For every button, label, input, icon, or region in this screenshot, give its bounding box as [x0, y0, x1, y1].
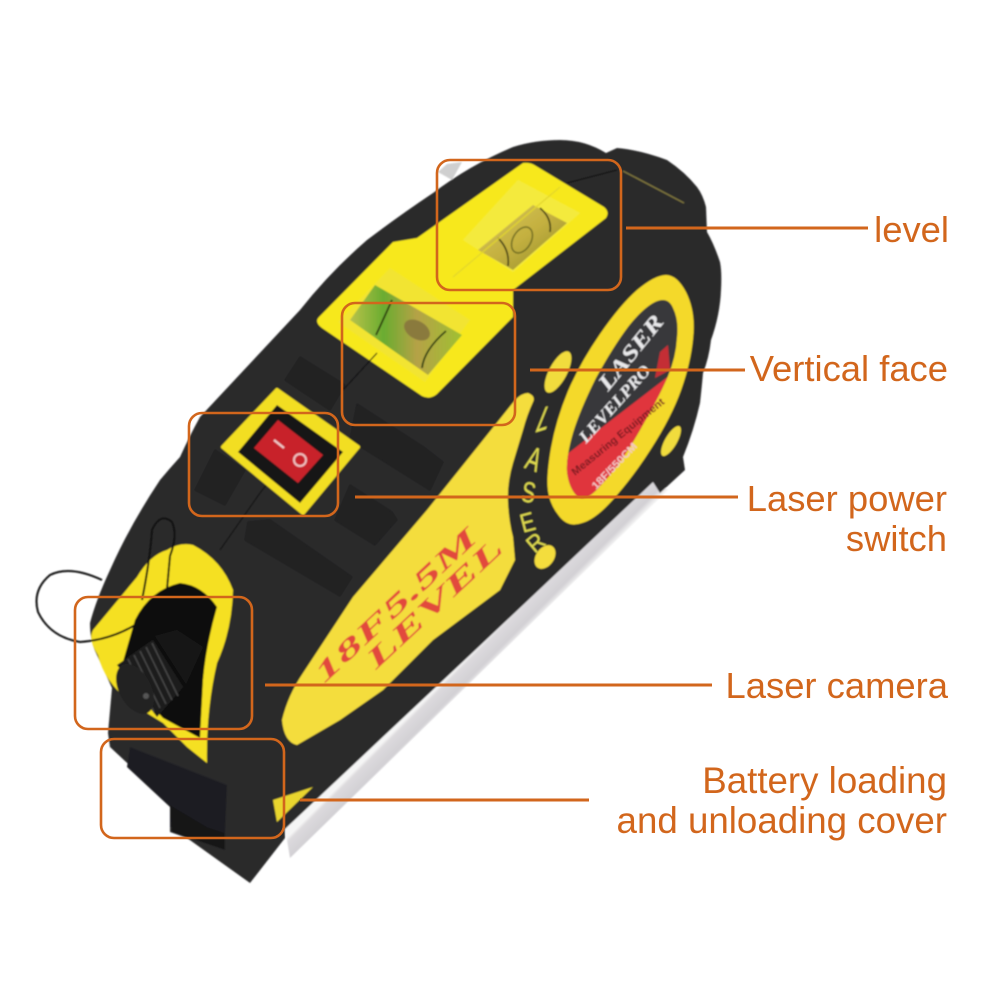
label: battery cover: Battery loading	[702, 760, 947, 801]
laser camera housing	[91, 544, 233, 763]
housing recesses	[463, 180, 580, 272]
yellow arrow marker	[273, 787, 313, 822]
label: battery cover: and unloading cover	[617, 800, 947, 841]
leader: battery cover	[300, 798, 589, 802]
leader: laser camera	[265, 684, 712, 686]
lanyard string	[36, 518, 175, 642]
label: laser power switch: Laser power	[747, 478, 947, 519]
small yellow oval right	[657, 423, 685, 459]
leader: laser power switch	[355, 496, 738, 498]
leader lines	[265, 228, 868, 800]
red band	[566, 344, 671, 499]
vertical LASER lettering: S	[519, 476, 538, 510]
battery cover	[127, 747, 227, 850]
vertical LASER lettering: E	[517, 507, 539, 539]
callout boxes	[75, 160, 621, 838]
labels	[617, 209, 949, 841]
vertical LASER lettering: L	[530, 396, 560, 442]
badge text LEVELPRO: LEVELPRO	[574, 361, 655, 447]
box: vertical face	[342, 303, 515, 425]
label: vertical face: Vertical face	[750, 348, 948, 389]
badge text Measuring Equipment: Measuring Equipment	[569, 396, 667, 478]
silver strip behind top	[438, 162, 462, 180]
18F5.5M text: 18F5.5M	[308, 520, 485, 688]
top clip highlight	[623, 171, 684, 203]
LEVEL text: LEVEL	[358, 532, 509, 676]
box: laser camera	[75, 597, 252, 729]
horizontal bubble vial	[478, 205, 567, 270]
box: laser power switch	[189, 413, 338, 516]
label: laser camera: Laser camera	[726, 665, 949, 706]
body seam	[220, 170, 617, 550]
leader: level	[626, 226, 868, 230]
lower recess	[338, 268, 470, 382]
black rubber body	[90, 140, 721, 883]
badge text size: 18F/550CM	[590, 440, 640, 492]
red printed text on panel	[308, 520, 509, 688]
laser level product photo	[36, 140, 721, 883]
small yellow oval	[539, 347, 577, 397]
vertical LASER lettering: A	[521, 439, 547, 479]
vertical LASER lettering: R	[521, 527, 551, 558]
power switch	[223, 390, 358, 513]
yellow dot	[530, 541, 560, 573]
yellow level housing	[317, 163, 608, 398]
label: laser power switch: switch	[846, 518, 947, 559]
housing seam	[453, 187, 560, 277]
label: level: level	[874, 209, 949, 250]
vertical LASER lettering	[517, 396, 560, 558]
vertical bubble vial	[350, 285, 462, 375]
raised grip pads	[195, 357, 443, 596]
leader: vertical face	[530, 368, 745, 372]
box: level	[437, 160, 621, 290]
metal tape blade	[285, 478, 668, 858]
knurled lens	[108, 630, 203, 720]
box: battery cover	[101, 739, 284, 838]
badge text LASER: LASER	[592, 309, 669, 396]
round tape badge	[547, 275, 700, 530]
yellow swoosh panel	[282, 393, 534, 745]
